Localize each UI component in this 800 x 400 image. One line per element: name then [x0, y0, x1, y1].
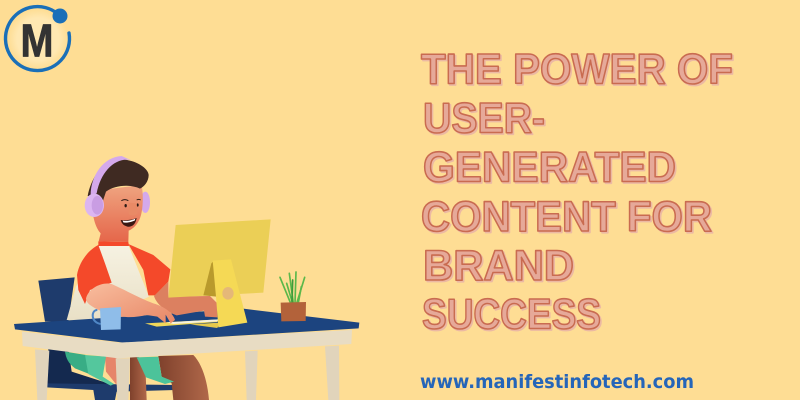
logo — [5, 7, 69, 71]
desk legs — [35, 346, 339, 400]
title outlined text: CONTENT FOR — [421, 193, 712, 241]
headphones — [85, 156, 131, 217]
title shadow — [422, 47, 734, 340]
title outlined text: GENERATED — [423, 144, 676, 192]
title outlined text: THE POWER OF — [421, 46, 733, 94]
keyboard — [145, 319, 220, 328]
potted plant — [280, 272, 306, 321]
near arm and hand — [86, 284, 175, 323]
website url: www.manifestinfotech.com — [420, 371, 694, 393]
title shadow: BRAND — [424, 244, 576, 292]
title outlined text: USER- — [423, 94, 545, 142]
title outlined text — [421, 46, 733, 338]
monitor back — [168, 219, 271, 298]
neck and face — [92, 185, 143, 242]
title shadow: CONTENT FOR — [422, 194, 714, 242]
title outlined text: SUCCESS — [422, 290, 601, 338]
illustration: person at desk — [14, 156, 359, 400]
hair — [88, 159, 149, 202]
legs and shorts of person — [65, 352, 209, 400]
title — [421, 46, 734, 340]
logo: M — [20, 14, 54, 66]
red sleeves and collar — [77, 241, 170, 304]
torso — [67, 245, 149, 320]
title shadow: GENERATED — [424, 145, 678, 193]
desk top — [14, 309, 359, 343]
facial features — [121, 199, 141, 227]
title shadow: THE POWER OF — [422, 47, 734, 95]
desk apron — [22, 330, 352, 358]
coffee mug — [93, 307, 121, 330]
headphone far cup — [141, 192, 150, 213]
chair — [38, 277, 175, 400]
title outlined text: BRAND — [423, 242, 574, 290]
monitor stand — [203, 259, 247, 327]
title shadow: SUCCESS — [424, 292, 602, 340]
title shadow: USER- — [424, 96, 546, 144]
far arm — [154, 282, 217, 317]
